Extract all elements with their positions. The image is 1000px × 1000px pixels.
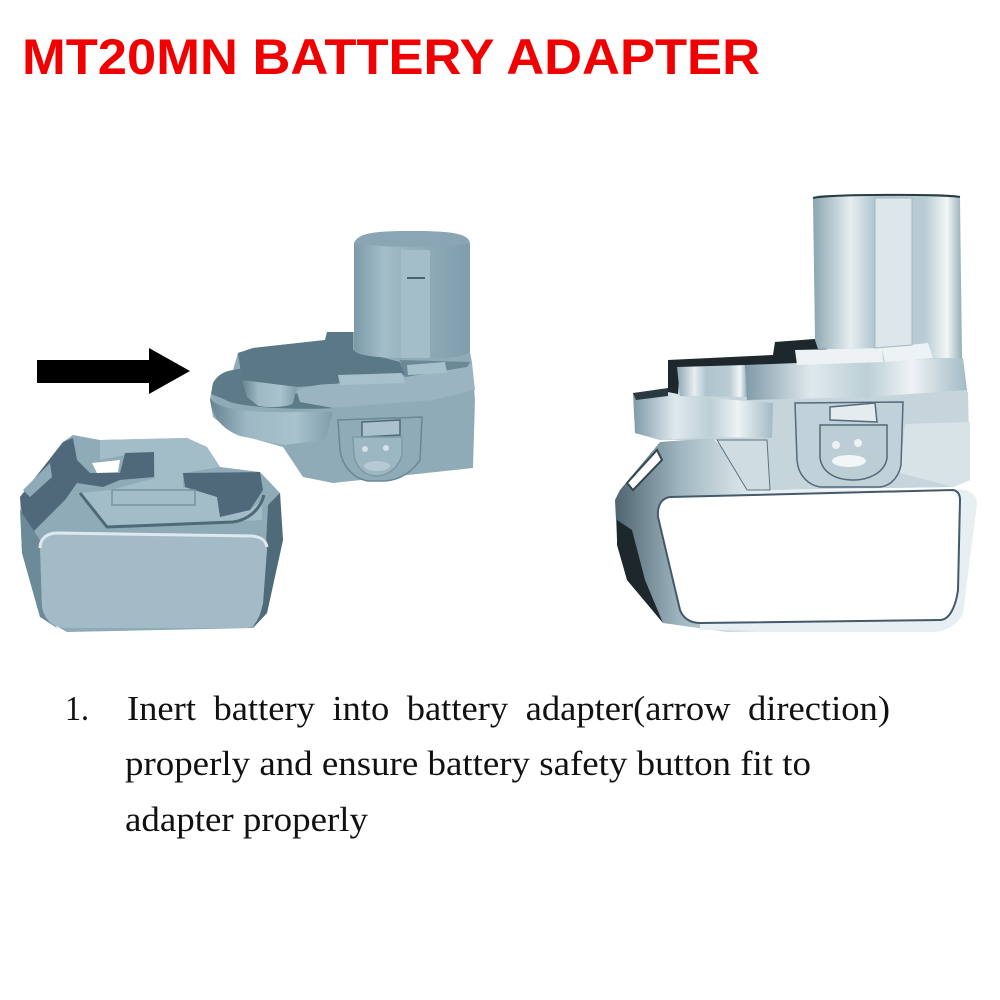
battery shell <box>20 435 283 632</box>
adapter cylinder <box>354 231 470 359</box>
assembled adapter lower <box>717 392 970 490</box>
adapter upper band <box>297 363 475 408</box>
battery window <box>92 460 120 473</box>
assembled upper band <box>745 358 967 400</box>
battery left dark corner <box>20 438 154 540</box>
adapter (separate) <box>210 231 475 483</box>
battery curved rail <box>80 493 264 527</box>
battery upper light surface <box>80 438 262 528</box>
assembled latch <box>795 402 903 487</box>
battery front face <box>40 533 267 628</box>
adapter slides <box>338 373 405 385</box>
adapter flange front <box>210 398 333 445</box>
step line 2: properly and ensure battery safety button fit to <box>125 744 811 783</box>
assembled adapter and battery <box>615 195 977 632</box>
adapter deck <box>238 332 405 387</box>
instruction text <box>65 689 890 839</box>
step line 3: adapter properly <box>125 800 369 839</box>
arrow <box>37 348 190 394</box>
assembled battery face <box>658 490 960 623</box>
assembled cylinder <box>813 195 962 358</box>
battery right dark terminal <box>183 472 263 517</box>
assembled silhouette <box>633 339 970 490</box>
assembled base flange <box>633 390 773 440</box>
step line 1: Inert battery into battery adapter(arrow direction) <box>127 689 890 728</box>
adapter flange top <box>210 368 335 409</box>
title: MT20MN BATTERY ADAPTER <box>22 29 760 85</box>
battery left side <box>20 510 57 628</box>
battery (separate) <box>20 435 283 632</box>
adapter pillar <box>242 380 297 407</box>
assembled adapter ribs <box>717 440 770 490</box>
step number: 1. <box>65 689 89 728</box>
assembled battery highlight strip <box>627 450 662 490</box>
assembled pillar <box>677 365 747 397</box>
assembled dark step <box>668 339 830 394</box>
battery right side <box>253 493 283 628</box>
assembled slides <box>795 348 883 365</box>
adapter latch <box>338 417 422 481</box>
adapter silhouette <box>210 332 475 483</box>
assembled battery black side <box>617 520 663 623</box>
assembled battery body <box>615 438 977 632</box>
